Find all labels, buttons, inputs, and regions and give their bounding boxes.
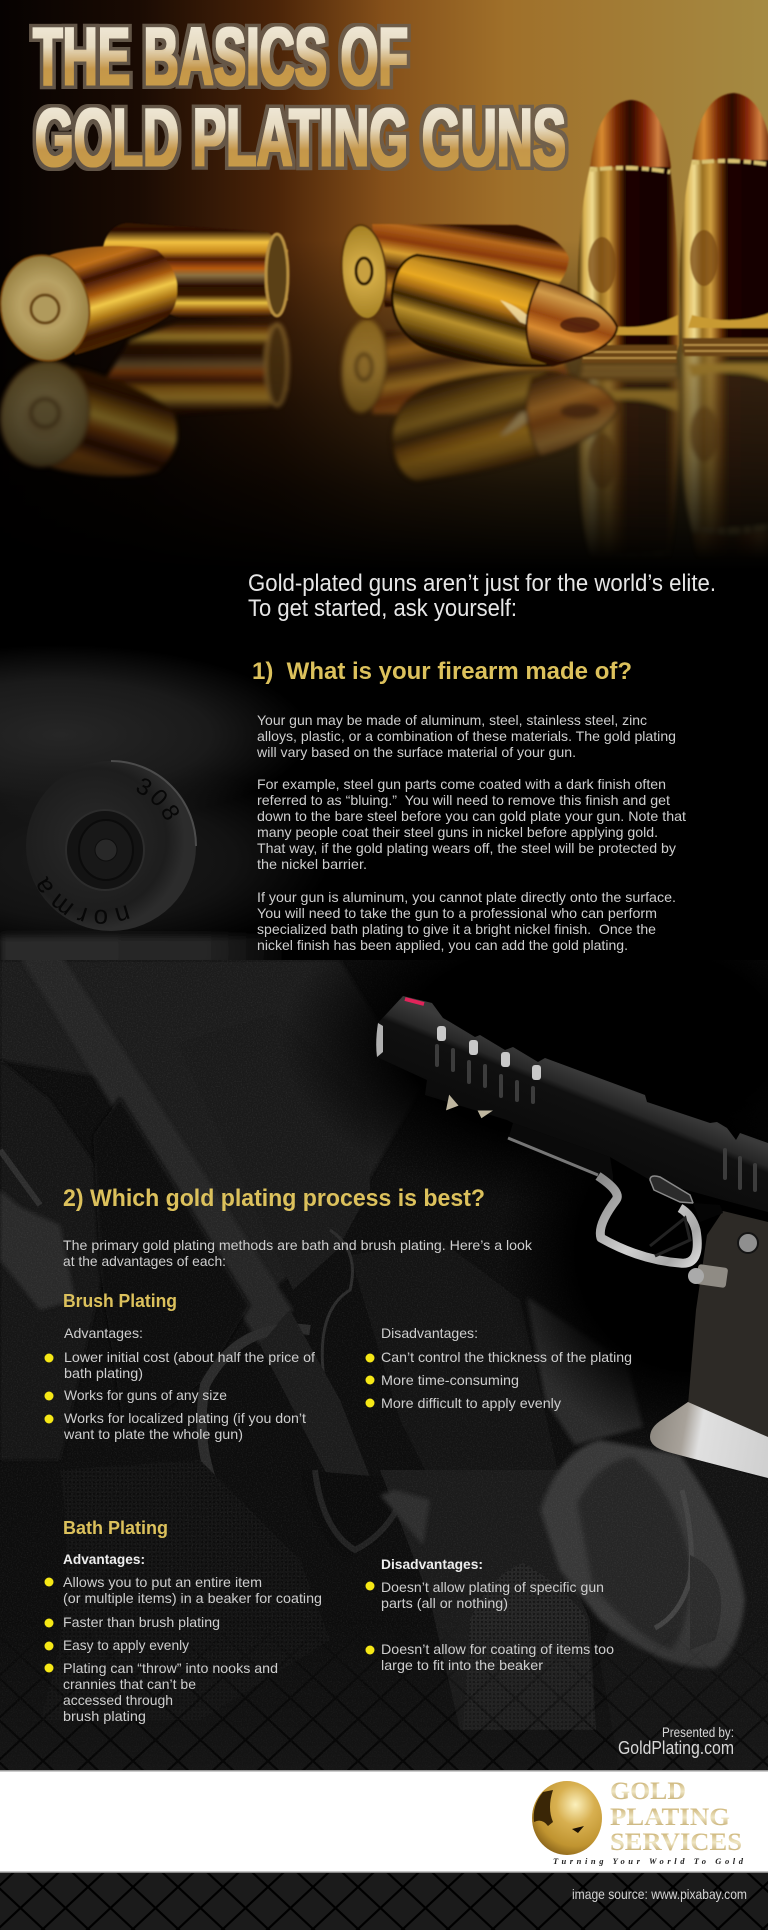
logo tagline: Turning Your World To Gold [553,1856,744,1866]
logo wordmark [610,1778,742,1856]
list: brush plating disadvantages: Disadvantages: [381,1325,478,1341]
text block: question 1 body: referred to as “bluing.” You will need to remove this finish and get [257,792,670,808]
pistol slide [377,996,768,1212]
logo: gold globe [532,1781,602,1855]
text block: section 2 intro [63,1237,533,1269]
icon: cartridge head: 308 [136,778,179,820]
text block: question 1 body: many people coat their steel guns in nickel before applying gold. [257,824,658,840]
bullet: standing right [680,93,768,356]
presented by credit [618,1725,734,1758]
text block: question 1 body: For example, steel gun parts come coated with a dark finish often [257,776,666,792]
text block: question 1 body: Your gun may be made of aluminum, steel, stainless steel, zinc [257,712,647,728]
list: brush plating advantages: Advantages: [64,1325,143,1341]
list: brush plating disadvantages: More time-consuming [381,1372,519,1388]
text block: question 1 body: If your gun is aluminum, you cannot plate directly onto the surface. [257,889,676,905]
bullet: standing left [578,100,679,363]
list: bath plating advantages: Plating can “throw” into nooks and [63,1660,278,1676]
list: bath plating disadvantages: Doesn’t allow plating of specific gun [381,1579,604,1595]
list: bath plating advantages: Allows you to put an entire item [63,1574,262,1590]
list: bath plating disadvantages: large to fit into the beaker [381,1657,543,1673]
logo wordmark: SERVICES [610,1829,742,1856]
panel: engraved gun background [0,960,768,1770]
list: bath plating advantages: brush plating [63,1708,146,1724]
pistol grip [688,1211,768,1440]
intro text [248,570,716,622]
list: bath plating disadvantages: Doesn’t allow for coating of items too [381,1641,614,1657]
text block: question 1 body: the nickel barrier. [257,856,367,872]
heading: question 1: 1) What is your firearm made of? [252,658,632,685]
text block: section 2 intro: The primary gold plating methods are bath and brush plating. Here’s a look [63,1237,533,1253]
bullet: front centre [392,255,617,366]
magwell base [650,1402,768,1478]
list: brush plating disadvantages [366,1325,632,1411]
footer strip with lattice pattern [0,1872,768,1930]
presented by credit: Presented by: [662,1725,734,1740]
panel: coin background [0,656,287,960]
list: brush plating disadvantages: Can’t control the thickness of the plating [381,1349,632,1365]
text block: question 1 body: specialized bath plating to give it a bright nickel finish. Once the [257,921,656,937]
list: brush plating disadvantages: More difficult to apply evenly [381,1395,561,1411]
icon: cartridge head [27,760,197,931]
logo wordmark: GOLD [610,1778,686,1805]
reflection of bullets on table [0,319,768,549]
list: brush plating advantages: want to plate the whole gun) [63,1426,243,1442]
panel: hero background with gold glow [0,0,768,570]
list: brush plating advantages: Works for guns of any size [64,1387,227,1403]
trigger guard [598,1176,728,1288]
list: bath plating disadvantages: Disadvantages: [381,1556,483,1572]
list: brush plating advantages: Lower initial cost (about half the price of [64,1349,315,1365]
text block: question 1 body: nickel finish has been applied, you can add the gold plating. [257,937,628,953]
list: bath plating advantages: Faster than brush plating [63,1614,220,1630]
panel: white logo band [0,1770,768,1873]
text block: question 1 body: alloys, plastic, or a combination of these materials. The gold plating [257,728,676,744]
text block: section 2 intro: at the advantages of each: [63,1253,226,1269]
list: bath plating disadvantages [366,1556,614,1673]
list: bath plating advantages: Advantages: [63,1551,145,1567]
presented by credit: GoldPlating.com [618,1738,734,1758]
title [33,12,566,184]
text block: question 1 body: will vary based on the surface material of your gun. [256,744,576,760]
list: brush plating advantages: Works for localized plating (if you don’t [64,1410,306,1426]
list: brush plating advantages [44,1325,315,1442]
logo wordmark: PLATING [610,1804,730,1831]
intro text: To get started, ask yourself: [248,595,517,622]
icon: cartridge head: norma [38,876,130,924]
list: bath plating advantages [44,1551,322,1724]
slide stop [650,1176,693,1203]
text block: question 1 body: down to the bare steel before you can gold plate your gun. Note that [257,808,686,824]
text block: question 1 body [256,712,686,953]
title: THE BASICS OF [33,12,408,102]
list: brush plating advantages: bath plating) [64,1365,143,1381]
list: bath plating advantages: Easy to apply evenly [63,1637,189,1653]
list: bath plating advantages: accessed through [63,1692,173,1708]
text block: question 1 body: You will need to take the gun to a professional who can perform [257,905,657,921]
subheading: bath plating: Bath Plating [63,1518,168,1538]
list: bath plating advantages: (or multiple items) in a beaker for coating [63,1590,322,1606]
subheading: brush plating: Brush Plating [63,1291,177,1311]
grip screw [738,1233,758,1253]
text block: question 1 body: That way, if the gold plating wears off, the steel will be protected by [257,840,676,856]
illustration: pistol [376,996,768,1478]
list: bath plating advantages: crannies that can’t be [63,1676,196,1692]
list: bath plating disadvantages: parts (all or nothing) [381,1595,508,1611]
intro text: Gold-plated guns aren’t just for the world’s elite. [248,570,716,597]
bullet casing: front left [0,246,177,369]
bullet casing: back centre [338,223,569,321]
hero image: gold bullets and reflections [0,92,768,549]
bullet casing: back left [102,223,288,318]
heading: question 2: 2) Which gold plating process is best? [63,1185,485,1212]
